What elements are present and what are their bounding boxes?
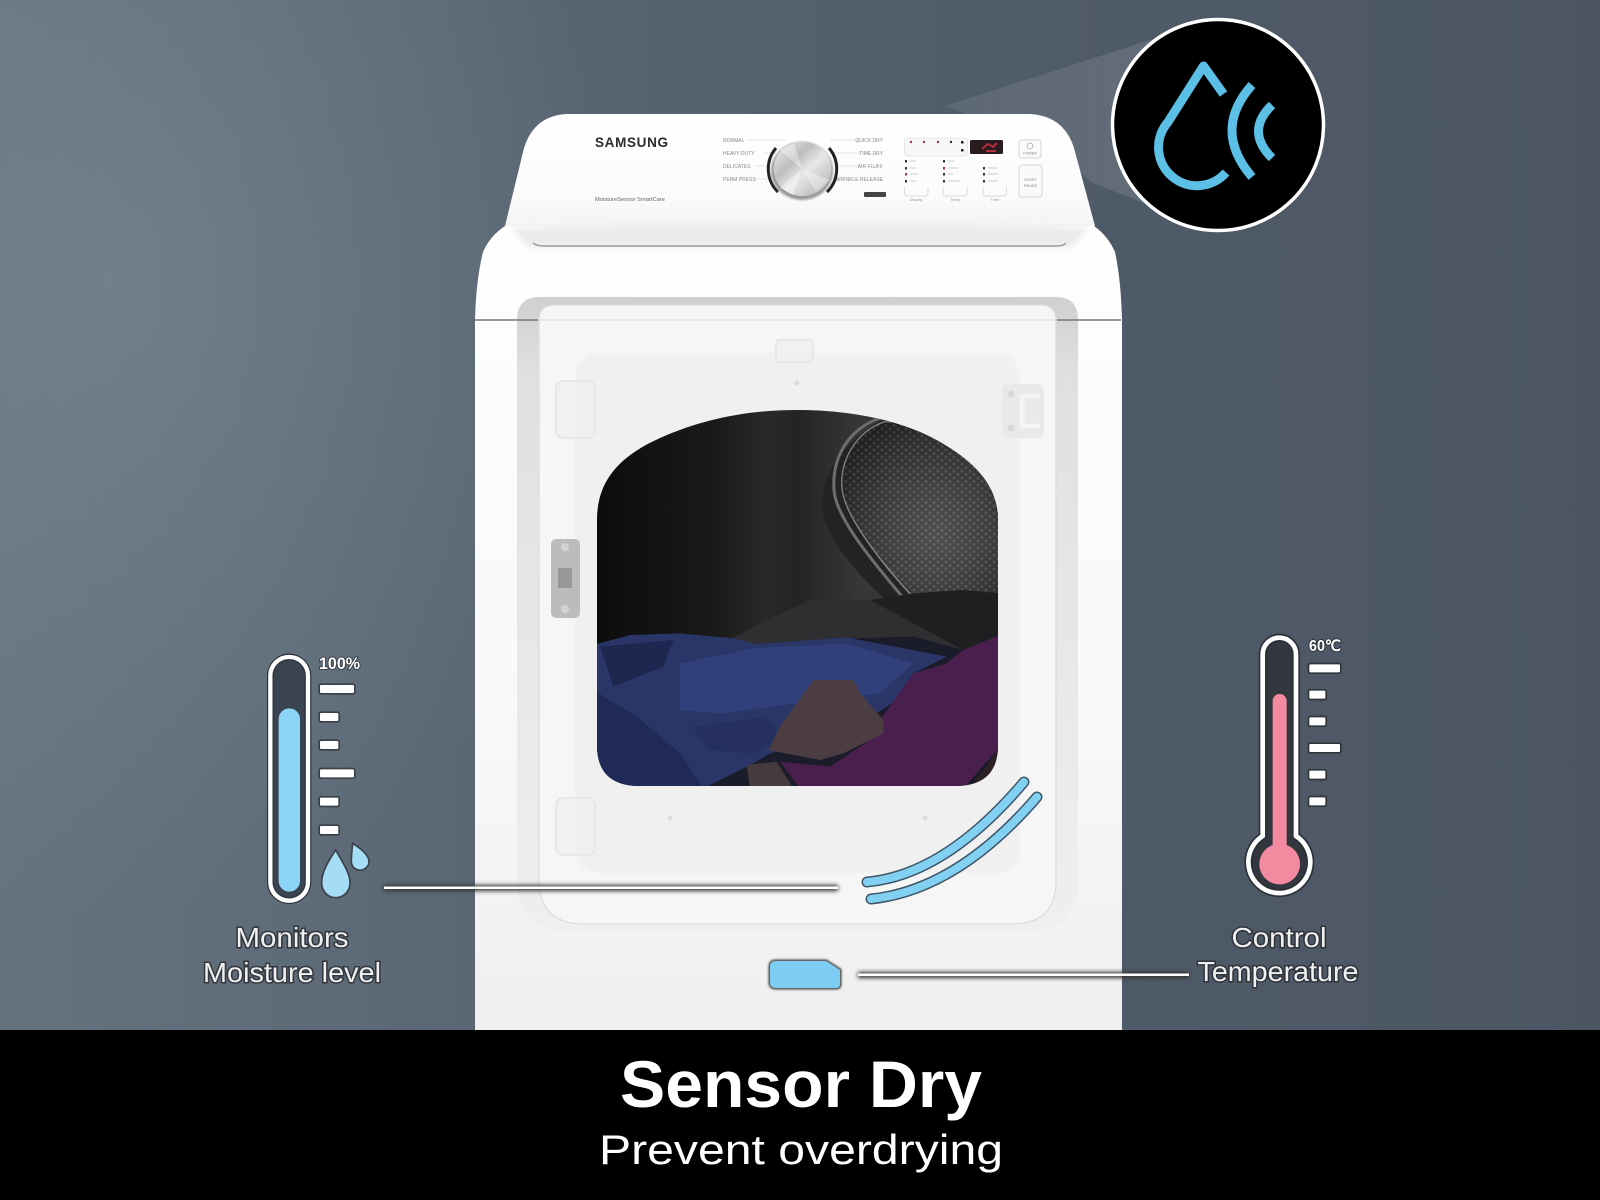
indicator dots: [905, 160, 985, 182]
label: control temperature: [1198, 922, 1358, 987]
cycle lines: [747, 140, 860, 179]
moisture sensor bars: [867, 782, 1037, 899]
gauge tube: [270, 657, 308, 901]
cycle labels left: HEAVY DUTY: [723, 151, 755, 157]
control dial: [768, 142, 837, 200]
brown garment: [768, 680, 883, 760]
subtitle: Prevent overdrying: [599, 1126, 1003, 1173]
thermometer fill: [1259, 694, 1300, 884]
cycle labels left: [723, 138, 756, 183]
gauge maximum label: 100%: [319, 655, 360, 673]
thermometer maximum label: 60℃: [1309, 638, 1342, 655]
cycle labels left: DELICATES: [723, 164, 751, 170]
leader line: moisture: [384, 885, 838, 891]
leader line: temperature: [858, 972, 1189, 978]
digital display: [970, 140, 1003, 154]
icon: moisture sensor badge: [1112, 20, 1324, 230]
option buttons: [904, 187, 1006, 196]
option labels: [909, 197, 1000, 202]
power button: [1019, 140, 1041, 158]
temperature gauge: [1248, 638, 1342, 893]
window with laundry: [593, 410, 1000, 808]
light beam from dryer to icon: [945, 18, 1218, 232]
label: control temperature: Temperature: [1198, 956, 1358, 987]
temperature sensor block: [770, 961, 840, 988]
gauge ticks: [320, 685, 354, 834]
option lines: [910, 161, 998, 181]
cycle labels right: QUICK DRY: [855, 138, 884, 144]
cycle labels right: TIME DRY: [859, 151, 884, 157]
cycle labels left: PERM PRESS: [723, 177, 756, 183]
dryer: [475, 114, 1122, 1030]
label: monitors moisture level: [203, 922, 381, 988]
status panel: [904, 138, 968, 156]
label: monitors moisture level: Monitors: [236, 922, 348, 953]
start button: [1019, 165, 1042, 197]
cycle labels right: WRINKLE RELEASE: [836, 177, 884, 183]
start button: START: [1024, 177, 1037, 182]
option labels: Temp: [950, 197, 961, 202]
drum interior: [597, 410, 998, 786]
option labels: Display: [909, 197, 923, 202]
dark badge: [864, 192, 886, 197]
blue garment: [593, 633, 947, 788]
label: control temperature: Control: [1232, 922, 1326, 953]
water drops: [322, 843, 369, 898]
door recess: [517, 297, 1078, 931]
cycle labels right: [836, 138, 884, 183]
gauge fill: [279, 708, 300, 892]
model tagline: MoistureSensor SmartCare: [595, 197, 665, 203]
thermometer ticks: [1309, 664, 1340, 805]
dryer top console: [505, 114, 1095, 247]
power button: POWER: [1023, 152, 1037, 156]
door panel: [539, 305, 1056, 924]
title: Sensor Dry: [620, 1047, 982, 1121]
door handle: [551, 539, 580, 618]
cabinet seam: [475, 319, 1121, 321]
purple garment: [780, 635, 1000, 788]
lint filter: [822, 418, 998, 598]
thermometer outline: [1248, 638, 1310, 893]
door inner panel: [575, 353, 1020, 873]
door screws: [668, 380, 928, 820]
dark garment: [732, 590, 963, 650]
door hinge ghosts: [556, 340, 813, 855]
door hinge right: [1002, 384, 1044, 438]
option labels: Time: [991, 197, 1000, 202]
moisture gauge: [270, 655, 369, 901]
dryer cabinet: [475, 226, 1122, 1030]
cycle labels right: AIR FLUFF: [858, 164, 883, 170]
underlay shadow: [597, 636, 998, 786]
brand name: SAMSUNG: [595, 135, 668, 150]
start button: PAUSE: [1024, 183, 1037, 188]
label: monitors moisture level: Moisture level: [203, 957, 381, 988]
cycle labels left: NORMAL: [723, 138, 745, 144]
icon: drop and waves: [1159, 66, 1272, 186]
bottom caption band: [0, 1030, 1600, 1200]
